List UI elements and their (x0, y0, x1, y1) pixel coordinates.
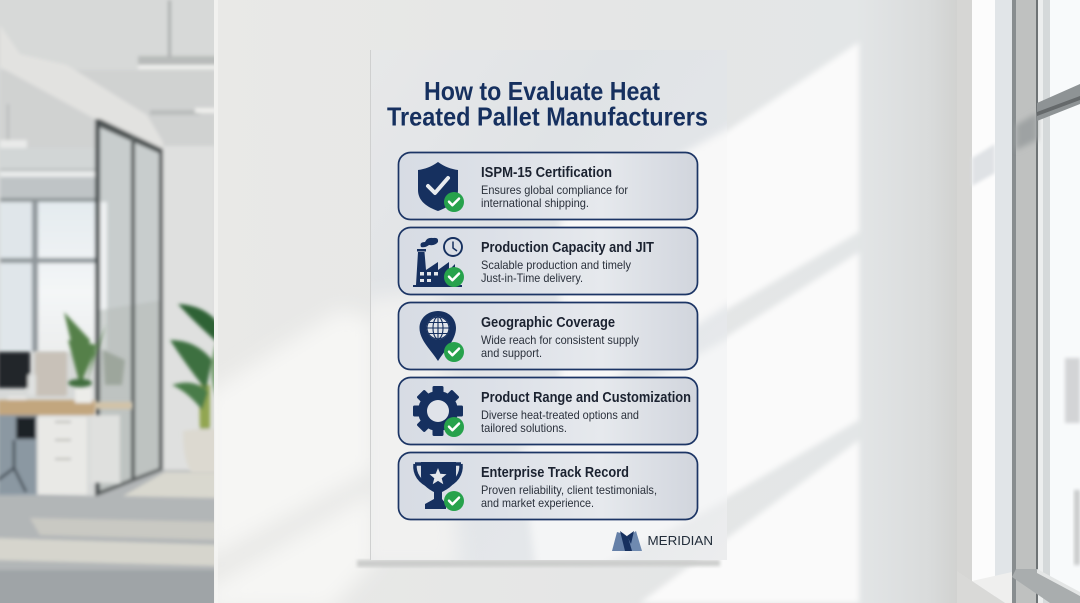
text: Geographic Coverage: Geographic Coverage (481, 315, 615, 331)
title (387, 76, 708, 132)
text: Production Capacity and JIT: Scalable production and timely (481, 259, 631, 272)
text: Enterprise Track Record (481, 465, 657, 510)
scene: sunlight on wall (205, 42, 859, 603)
text: Enterprise Track Record: Enterprise Track Record (481, 465, 629, 481)
title: How to Evaluate Heat (424, 76, 660, 106)
title: Treated Pallet Manufacturers (387, 102, 708, 132)
card: Product Range and Customization (398, 378, 698, 444)
icon: small desk plant (64, 312, 125, 388)
card: Geographic Coverage (398, 302, 698, 370)
panel: poster (370, 50, 727, 560)
text: Product Range and Customization (481, 390, 691, 435)
icon: floor plant in pot (170, 304, 220, 473)
text: Production Capacity and JIT: Just-in-Time delivery. (481, 272, 583, 285)
card: Production Capacity and JIT (398, 228, 698, 294)
text: ISPM-15 Certification: ISPM-15 Certification (481, 165, 612, 181)
scene: blurred office interior (0, 0, 220, 603)
icon: map pin with globe (420, 311, 464, 362)
text: Geographic Coverage: and support. (481, 347, 542, 360)
text: ISPM-15 Certification (481, 165, 628, 210)
text: Enterprise Track Record: Proven reliability, client testimonials, (481, 484, 657, 497)
text: ISPM-15 Certification: international shipping. (481, 197, 589, 210)
text: Product Range and Customization: Diverse heat-treated options and (481, 409, 639, 422)
text: ISPM-15 Certification: Ensures global compliance for (481, 184, 628, 197)
text: Geographic Coverage: Wide reach for consistent supply (481, 334, 639, 347)
icon: shield with check (418, 162, 464, 212)
text: Product Range and Customization: Product Range and Customization (481, 390, 691, 406)
logo: Meridian: MERIDIAN (648, 534, 713, 548)
text: Product Range and Customization: tailored solutions. (481, 422, 567, 435)
icon: trophy with star (415, 462, 464, 511)
text: Geographic Coverage (481, 315, 639, 360)
icon: factory with clock (413, 238, 464, 287)
icon: desk and monitors (0, 352, 132, 495)
poster shadow (357, 560, 720, 567)
text: Enterprise Track Record: and market experience. (481, 497, 594, 510)
text: Production Capacity and JIT: Production Capacity and JIT (481, 240, 654, 256)
scene: wall (215, 0, 960, 603)
scene: window frame (957, 0, 1080, 603)
text: Production Capacity and JIT (481, 240, 654, 285)
card: Enterprise Track Record (398, 452, 698, 520)
logo: Meridian (612, 531, 713, 551)
card: ISPM-15 Certification (398, 152, 698, 220)
icon: gear (413, 386, 464, 437)
